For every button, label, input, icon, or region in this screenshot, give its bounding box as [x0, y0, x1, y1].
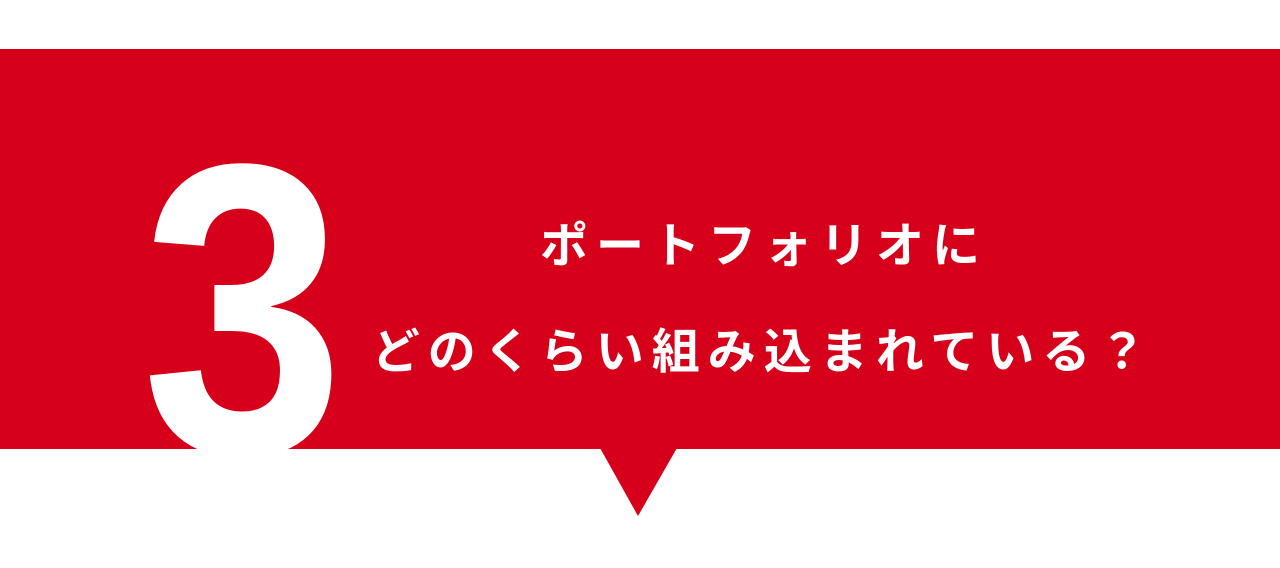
heading text — [372, 220, 1154, 379]
heading text: ポートフォリオに — [540, 220, 988, 273]
heading text: どのくらい組み込まれている？ — [372, 326, 1154, 379]
big number 3: 3 — [141, 77, 345, 541]
